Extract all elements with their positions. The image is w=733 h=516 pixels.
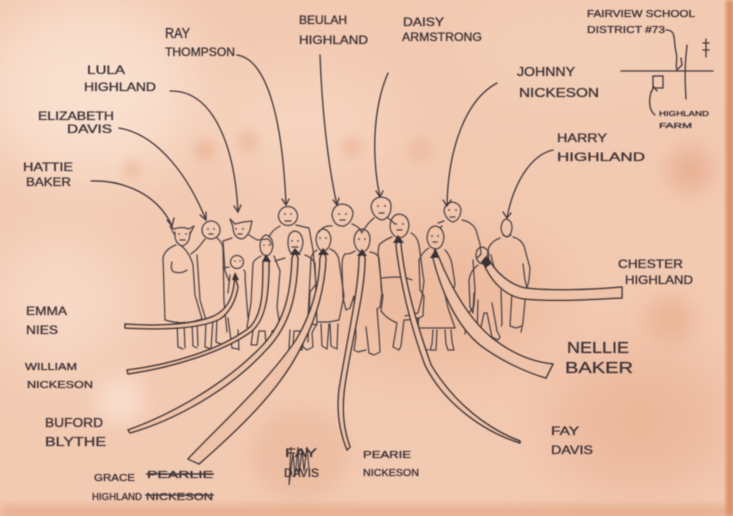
label: Nellie Baker [565,340,633,377]
label: Johnny Nickeson: JOHNNY [517,64,575,79]
arrow: Hattie Baker [91,181,174,226]
label: Elizabeth Davis [38,109,114,136]
figure: Harry Highland [487,219,530,332]
label: Fay Davis, scribbled out [284,446,319,485]
figure: Buford Blythe [275,231,317,350]
sash: William Nickeson [127,256,269,374]
arrow: Elizabeth Davis [119,128,206,220]
label: Nellie Baker: NELLIE [567,340,629,357]
sash: Pearie Nickeson [338,250,365,450]
label: Elizabeth Davis: ELIZABETH [38,109,114,123]
label: Hattie Baker: HATTIE [23,160,73,174]
label: Chester Highland [618,257,693,287]
label: Emma Nies: NIES [26,323,58,337]
label: Daisy Armstrong: ARMSTRONG [402,30,482,44]
map label: Highland farm [659,111,709,130]
label: Buford Blythe [45,415,106,449]
map label: Highland farm: FARM [659,123,692,130]
label: Hattie Baker [23,160,73,189]
label: Johnny Nickeson: NICKESON [519,85,599,100]
label: Fay Davis, scribbled out: DAVIS [284,466,319,480]
label: Pearie Nickeson: NICKESON [363,468,419,479]
label: William Nickeson [25,362,93,391]
sash: Fay Davis [396,237,520,443]
label: Pearie Nickeson: PEARIE [363,450,411,461]
figure: William Nickeson [247,235,280,345]
figure: Pearie Nickeson [342,229,382,355]
sash: Grace Highland [188,250,326,464]
label: Beulah Highland: BEULAH [299,13,347,27]
label: William Nickeson: WILLIAM [25,362,77,373]
figure: Fay Davis standing center [378,214,428,350]
label: Buford Blythe: BUFORD [45,415,103,430]
label: Hattie Baker: BAKER [26,175,71,189]
label: Grace Highland, corrected name [92,470,214,503]
map label: district [587,9,695,36]
label: Nellie Baker: BAKER [565,360,633,377]
figure: Daisy Armstrong [362,197,395,232]
label: Fay Davis right: FAY [551,424,579,438]
figure: Elizabeth Davis [191,221,227,349]
label: Chester Highland: HIGHLAND [625,273,693,287]
arrow: Harry Highland [503,150,553,218]
figure: Nellie Baker [417,226,455,350]
label: Daisy Armstrong: DAISY [403,15,444,29]
label: Emma Nies: EMMA [26,304,67,318]
label: Lula Highland [84,63,156,94]
label: Johnny Nickeson [517,64,599,100]
figure: Lula Highland [223,219,271,350]
label: Grace Highland, corrected name: GRACE [94,473,135,484]
label: Beulah Highland: HIGHLAND [299,33,368,47]
label: Pearie Nickeson [363,450,419,479]
figure: Johnny Nickeson [438,202,481,334]
label: Fay Davis right [551,424,593,457]
label: Fay Davis right: DAVIS [551,443,593,457]
map label: Highland farm: HIGHLAND [659,111,709,118]
label: Ray Thompson: RAY [165,25,190,42]
map label: district: DISTRICT #73 [587,25,666,36]
arrow: Daisy Armstrong [375,73,388,197]
figure: Beulah Highland [319,204,362,233]
label: Harry Highland: HIGHLAND [557,150,645,164]
label: Elizabeth Davis: DAVIS [67,122,112,136]
figure: Ray Thompson [269,206,316,350]
sash: Emma Nies [125,277,238,329]
label: Beulah Highland [299,13,368,47]
label: Ray Thompson [165,25,235,59]
figure: Chester Highland [469,247,500,341]
label: Harry Highland: HARRY [557,131,607,145]
arrow: Lula Highland [170,91,241,212]
label: Lula Highland: HIGHLAND [84,80,156,94]
figure: Grace Highland [308,229,344,349]
map: Fairview school district and Highland farm [621,30,713,115]
sash: Chester Highland [483,258,622,300]
arrow: Ray Thompson [237,55,289,205]
map label: district: FAIRVIEW SCHOOL [587,9,695,20]
sash knots [232,235,491,280]
label: Emma Nies [26,304,67,337]
label: Chester Highland: CHESTER [618,257,683,271]
label: Fay Davis, scribbled out: FAY [285,446,317,460]
sash: Nellie Baker [433,249,553,378]
sash: Buford Blythe [128,252,298,433]
label: Lula Highland: LULA [87,63,125,77]
arrow: Johnny Nickeson [443,83,497,206]
figure: Emma Nies [223,256,248,318]
label: Ray Thompson: THOMPSON [165,45,235,59]
label: Daisy Armstrong [402,15,482,44]
label: Buford Blythe: BLYTHE [45,434,106,449]
group of figures [163,197,530,355]
figure: Hattie Baker [163,226,202,349]
label: Grace Highland, corrected name: HIGHLAND [92,492,142,503]
label: Grace Highland, corrected name: NICKESON [146,492,213,503]
label: Grace Highland, corrected name: PEARLIE [147,470,214,481]
arrow: Beulah Highland [320,55,339,205]
label: Harry Highland [557,131,645,164]
label: William Nickeson: NICKESON [27,380,93,391]
